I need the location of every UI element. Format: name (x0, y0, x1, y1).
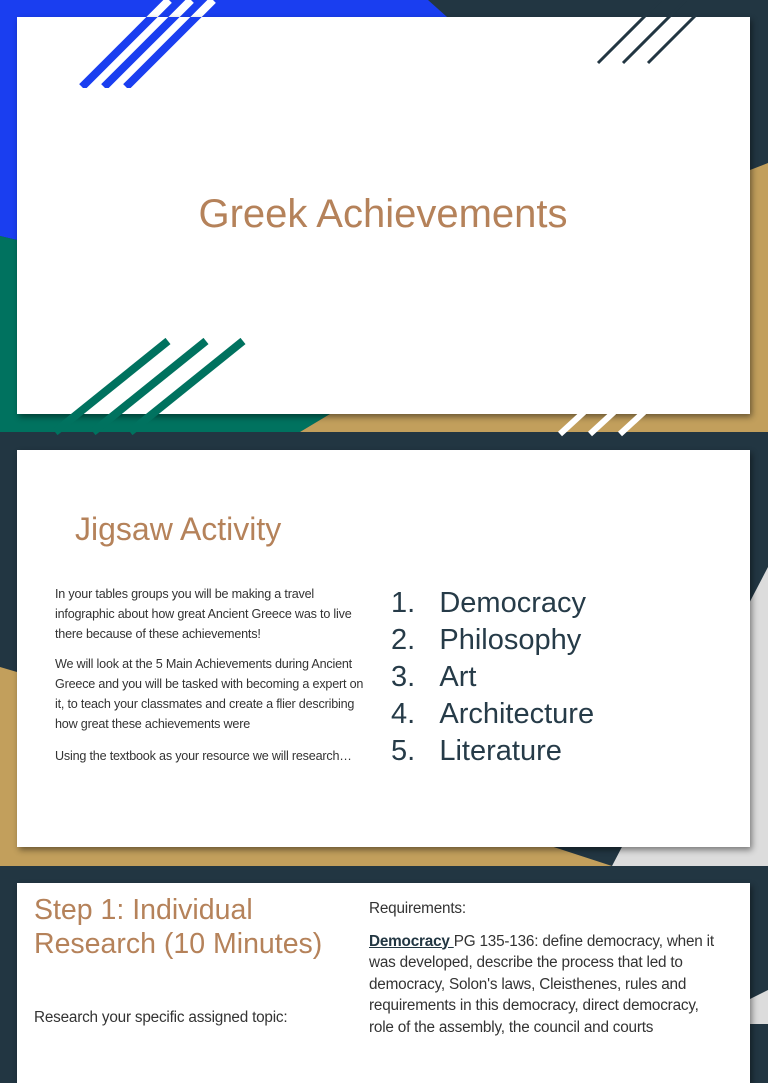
numbered list: 3. Art (391, 661, 476, 693)
numbered list: 1. Democracy (391, 587, 586, 619)
text block: requirements: was developed, describe the process that led to (369, 954, 683, 971)
heading: Step 1: Step 1: Individual (34, 894, 253, 926)
numbered list (391, 587, 594, 767)
text block: instructions: In your tables groups you will be making a travel (55, 587, 314, 601)
text block: instructions: it, to teach your classmates and create a flier describing (55, 697, 354, 711)
numbered list: 2. Philosophy (391, 624, 581, 656)
text block: instructions: Using the textbook as your resource we will research… (55, 749, 352, 763)
text: research topic: Research your specific assigned topic: (34, 1009, 287, 1026)
heading: Jigsaw Activity: Jigsaw Activity (75, 511, 281, 547)
text block: requirements (369, 900, 714, 1036)
title: Greek Achievements (198, 192, 568, 236)
text block: instructions: infographic about how great Ancient Greece was to live (55, 607, 352, 621)
slide 2 card (17, 450, 750, 847)
slide 3 card (17, 883, 750, 1083)
numbered list: 4. Architecture (391, 698, 594, 730)
text block: instructions: there because of these achievements! (55, 627, 261, 641)
numbered list: 5. Literature (391, 735, 562, 767)
text block: instructions: how great these achievements were (55, 717, 250, 731)
heading: Step 1 (34, 894, 322, 960)
text block: requirements: Democracy PG 135-136: define democracy, when it (369, 932, 714, 950)
text block: requirements: role of the assembly, the council and courts (369, 1018, 653, 1036)
text block: instructions: We will look at the 5 Main Achievements during Ancient (55, 657, 352, 671)
heading: Step 1: Research (10 Minutes) (34, 928, 322, 960)
decorative stripes slide 1 (55, 17, 696, 436)
text block: instructions (55, 587, 363, 763)
text block: requirements: democracy, Solon's laws, Cleisthenes, rules and (369, 976, 686, 992)
text block: requirements: Requirements: (369, 900, 466, 917)
text block: instructions: Greece and you will be tasked with becoming a expert on (55, 677, 363, 691)
slide 1 card (17, 17, 750, 414)
text block: requirements: requirements in this democracy, direct democracy, (369, 997, 699, 1014)
